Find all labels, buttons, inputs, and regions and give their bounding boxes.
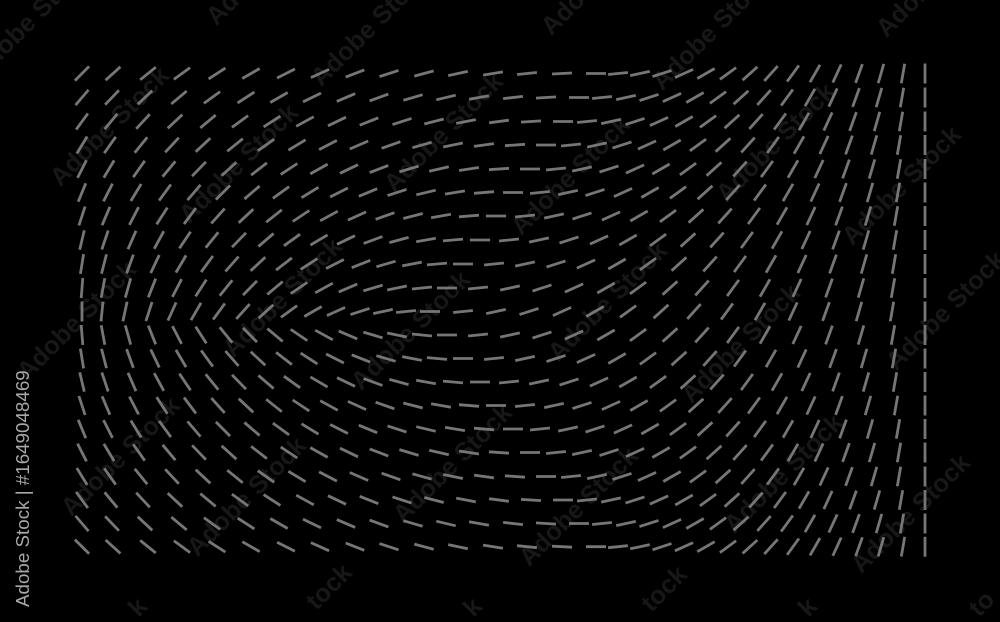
watermarks: Adobe Stock diagonal: Adobe Stock	[711, 77, 841, 208]
dash row 8	[80, 230, 925, 250]
dash row 16	[78, 419, 925, 439]
watermarks: Adobe Stock diagonal: Adobe Stock	[182, 431, 312, 562]
watermarks: Adobe Stock diagonal: Adobe Stock	[218, 232, 348, 363]
dash row 7	[79, 206, 925, 226]
dash row 4	[77, 135, 925, 155]
watermarks: Adobe Stock diagonal: Adobe Stock	[174, 98, 304, 229]
watermarks: Adobe Stock diagonal: Adobe Stock	[388, 398, 518, 529]
dash row 2	[76, 88, 925, 108]
dash row 3	[76, 112, 925, 132]
dash row 13	[80, 348, 925, 368]
watermarks: Adobe Stock diagonal: tock	[636, 560, 693, 617]
dash row 12	[81, 325, 925, 345]
watermarks: Adobe Stock diagonal: k	[458, 592, 488, 622]
watermarks: Adobe Stock diagonal: k	[123, 592, 153, 622]
dash row 19	[76, 490, 925, 510]
dash row 10	[81, 278, 925, 298]
watermarks: Adobe Stock diagonal: to	[963, 585, 1000, 622]
watermarks: Adobe Stock diagonal: tock	[301, 558, 358, 615]
dash row 11	[82, 302, 925, 322]
watermarks: Adobe Stock diagonal: Adobe Stock	[506, 110, 636, 241]
watermarks: Adobe Stock diagonal: Adobe Stock	[379, 67, 509, 198]
watermarks: Adobe Stock diagonal: Adobe Stock	[56, 391, 186, 522]
watermarks: Adobe Stock diagonal: Adobe Stock	[676, 278, 806, 409]
dash row 9	[80, 254, 925, 274]
dash row 17	[78, 442, 925, 462]
watermarks: Adobe Stock diagonal: Adobe Stock	[12, 255, 142, 386]
watermarks: Adobe Stock diagonal: Adobe Stock	[346, 265, 476, 396]
watermarks: Adobe Stock diagonal: Adobe Stock	[543, 236, 673, 367]
dash row 1	[75, 64, 925, 84]
watermarks: Adobe Stock diagonal: Adobe Stock	[514, 441, 644, 572]
vertical stock id label: Adobe Stock | #1649048469	[12, 370, 33, 607]
dash field: 21 rows of 31 dashes	[75, 64, 925, 557]
watermarks: Adobe Stock diagonal: Adobe Stock	[719, 408, 849, 539]
dash row 18	[77, 466, 925, 486]
watermarks: Adobe Stock diagonal: Adobe Stock	[837, 120, 967, 251]
dash row 20	[76, 514, 925, 534]
dash row 6	[78, 182, 925, 202]
watermarks: Adobe Stock diagonal: Adobe Stock	[846, 448, 976, 579]
watermarks: Adobe Stock diagonal: Adobe Stock	[45, 61, 175, 192]
dash row 5	[78, 159, 925, 179]
watermarks: Adobe Stock diagonal: k	[793, 592, 823, 622]
dash row 21	[75, 537, 925, 557]
dash row 15	[79, 396, 925, 416]
dash row 14	[80, 372, 925, 392]
